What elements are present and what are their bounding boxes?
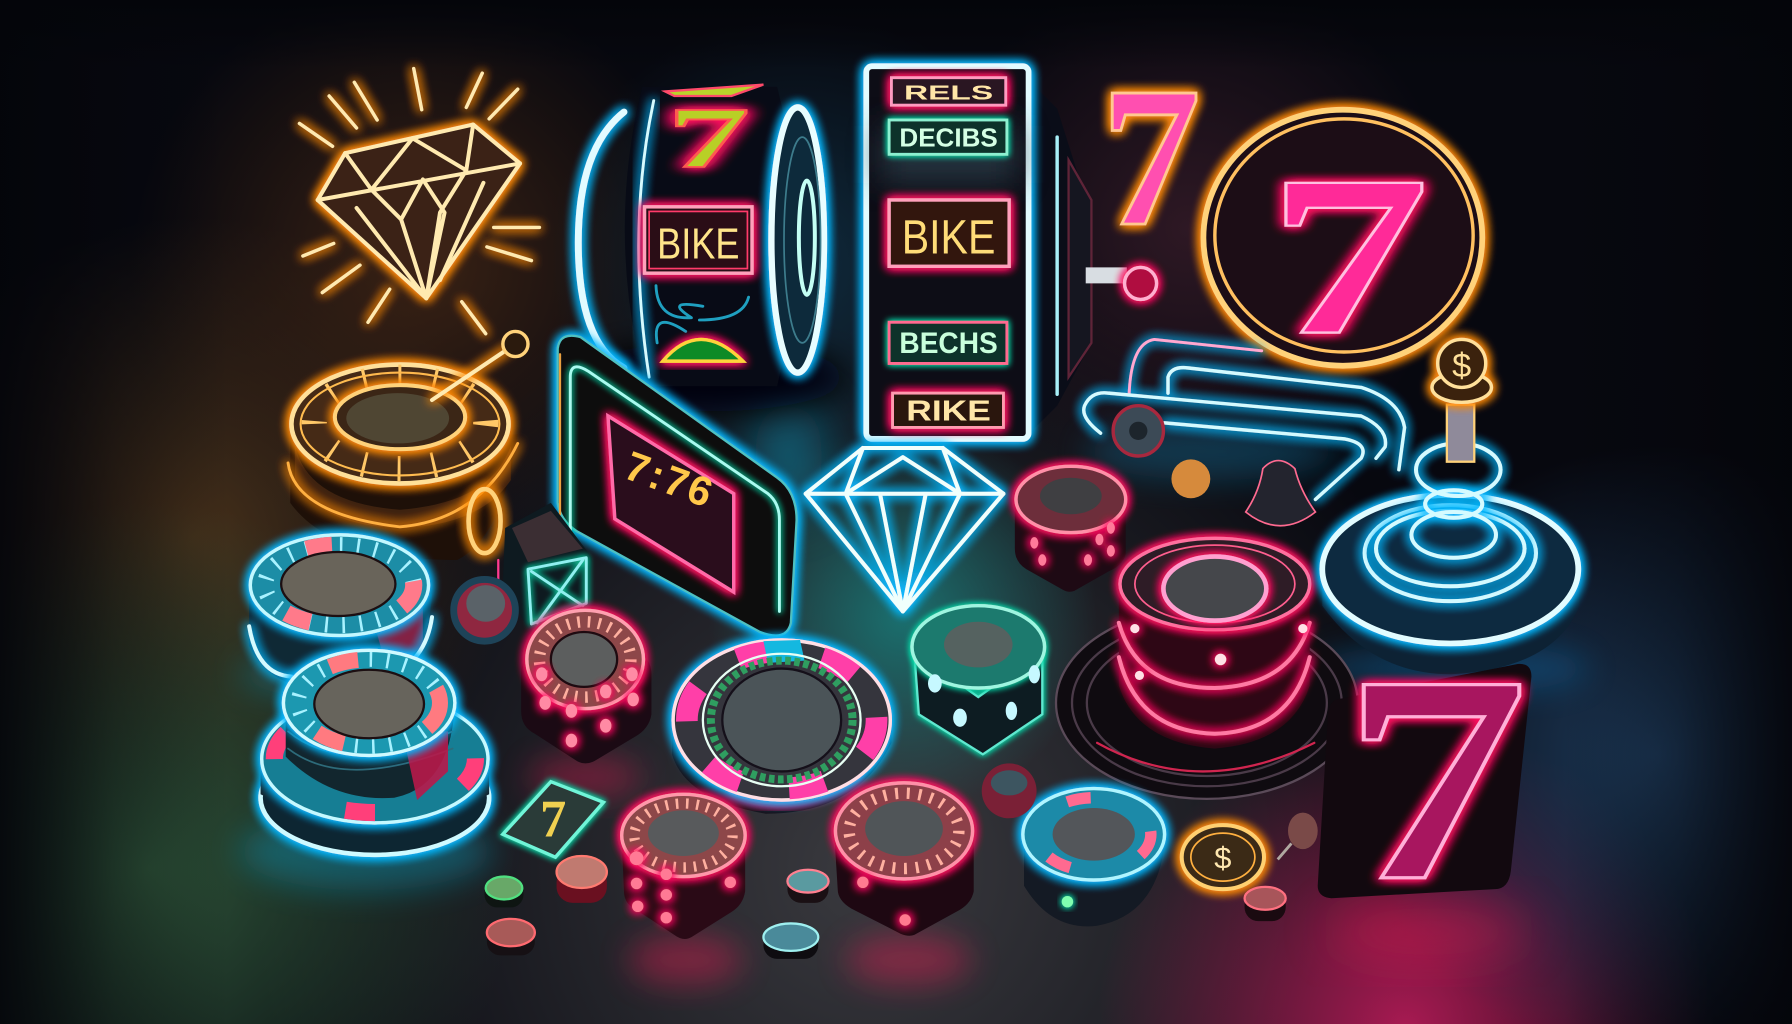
ring bbox=[469, 489, 501, 553]
tile bbox=[503, 782, 603, 857]
token: pink cyan bbox=[982, 763, 1037, 818]
box body bbox=[503, 503, 592, 629]
side stripe bbox=[402, 731, 448, 800]
label: bike: BIKE bbox=[902, 212, 995, 265]
die body bbox=[521, 651, 651, 763]
chip top bbox=[291, 365, 509, 483]
seven: 7 bbox=[1343, 615, 1528, 942]
knob: $ bbox=[1452, 347, 1471, 385]
dice: pink lower bbox=[622, 794, 745, 939]
cyan segment bbox=[763, 640, 805, 663]
inner disc bbox=[281, 552, 395, 616]
label: rike bbox=[893, 393, 1003, 428]
label: reels bbox=[891, 78, 1006, 105]
left slot reel bbox=[571, 85, 846, 411]
ring bbox=[673, 640, 890, 800]
flat seven bbox=[665, 85, 763, 96]
neon wire track bbox=[1084, 339, 1405, 499]
seven: 7 bbox=[540, 791, 566, 849]
base ring inner bbox=[1376, 511, 1525, 586]
upper ring bbox=[283, 650, 455, 755]
spring bbox=[1411, 443, 1501, 558]
label: reels: RELS bbox=[904, 81, 993, 104]
right rim bbox=[771, 107, 824, 373]
inner disc bbox=[722, 669, 841, 771]
ring spokes bbox=[265, 545, 414, 625]
top neon ring bbox=[1163, 557, 1266, 621]
pin head bbox=[503, 331, 528, 357]
token: red low bbox=[487, 919, 535, 955]
tablet neon line bbox=[570, 367, 779, 611]
rim grooves bbox=[784, 137, 821, 343]
top inner line bbox=[1135, 545, 1295, 623]
upper body bbox=[286, 703, 455, 798]
chip rim bbox=[301, 373, 499, 475]
tablet screen bbox=[608, 416, 734, 592]
side bbox=[672, 720, 891, 814]
box top bbox=[512, 511, 583, 562]
token: green bbox=[485, 877, 523, 907]
pink neon seven: 7 bbox=[1101, 47, 1201, 268]
pips bbox=[1030, 522, 1115, 566]
die top bbox=[527, 610, 643, 709]
lower ring bbox=[262, 695, 488, 823]
floor glow reflections bbox=[240, 400, 1589, 985]
metal bell bbox=[1246, 461, 1315, 526]
pips bbox=[857, 877, 911, 926]
green arc symbol bbox=[663, 339, 743, 361]
tower top bbox=[1120, 538, 1310, 630]
label: bike bbox=[645, 207, 752, 273]
side stripe bbox=[377, 606, 423, 674]
segments bbox=[1037, 798, 1151, 871]
top disc bbox=[865, 801, 943, 856]
top disc bbox=[944, 622, 1013, 667]
chip inner ring bbox=[335, 385, 465, 449]
body bbox=[1024, 834, 1166, 926]
die body bbox=[622, 834, 745, 939]
dice: pink center bbox=[834, 783, 974, 936]
green led bbox=[1062, 896, 1073, 907]
box face bbox=[528, 558, 586, 624]
tower body bbox=[1119, 594, 1310, 749]
neon tablet bbox=[558, 336, 797, 636]
right slot reel bbox=[866, 66, 1157, 439]
round neon seven sign bbox=[1203, 110, 1482, 382]
top disc bbox=[648, 810, 719, 856]
side hardware bbox=[1034, 86, 1091, 429]
die body bbox=[1015, 503, 1126, 592]
dice: pink left bbox=[521, 610, 651, 763]
small chip on wire bbox=[1113, 406, 1163, 456]
stack body bbox=[290, 432, 518, 560]
pips bbox=[536, 667, 639, 747]
dollar sign: $ bbox=[1214, 841, 1231, 876]
label: bike: BIKE bbox=[657, 220, 739, 268]
label: decibs: DECIBS bbox=[899, 122, 998, 152]
top bbox=[1023, 789, 1165, 880]
base glow bbox=[731, 777, 857, 801]
token: right bbox=[1245, 887, 1286, 921]
pin bbox=[432, 349, 509, 400]
swirl bbox=[656, 286, 749, 343]
lever bbox=[1086, 267, 1127, 283]
small tokens bbox=[485, 763, 1318, 959]
lever knob bbox=[1125, 267, 1157, 299]
neon joystick bbox=[1322, 339, 1579, 674]
card bbox=[1318, 664, 1531, 898]
rim hub bbox=[799, 181, 815, 295]
die body bbox=[834, 834, 974, 936]
coin inner bbox=[1191, 833, 1255, 881]
dice: pink upper right bbox=[1015, 466, 1126, 592]
upper spokes bbox=[298, 659, 440, 746]
pink chip tower on record bbox=[1056, 538, 1358, 799]
reel drum bbox=[625, 87, 795, 386]
inner disc bbox=[314, 670, 424, 738]
stack side bbox=[295, 446, 511, 528]
icon: gold neon diamond with rays bbox=[299, 69, 539, 334]
top ring bbox=[250, 535, 429, 635]
box accent bbox=[497, 560, 499, 617]
lower chip bbox=[261, 763, 489, 823]
top bbox=[1016, 466, 1126, 533]
tablet left edge bbox=[559, 354, 561, 514]
body stripes bbox=[288, 731, 453, 770]
center chip bbox=[672, 640, 891, 814]
sign disc bbox=[1203, 110, 1482, 366]
reel seven: 7 bbox=[667, 89, 750, 186]
cyan neon diamond bbox=[806, 448, 1003, 611]
knob bbox=[1432, 339, 1491, 402]
top bbox=[912, 606, 1045, 688]
side hub bbox=[1069, 160, 1091, 377]
neon seven card bbox=[1318, 615, 1531, 942]
shaft bbox=[1447, 405, 1474, 462]
die sides bbox=[914, 651, 1042, 754]
tablet body bbox=[558, 336, 797, 636]
top spokes bbox=[539, 622, 631, 697]
inner disc bbox=[1053, 808, 1135, 861]
base bbox=[1322, 495, 1578, 643]
side highlight bbox=[1056, 137, 1059, 394]
drum edge bbox=[639, 101, 654, 377]
gold chip stack bbox=[288, 331, 528, 560]
reel shadow bbox=[571, 343, 846, 411]
gold dollar coin bbox=[1182, 825, 1264, 889]
top disc bbox=[551, 632, 617, 687]
chip inner disc bbox=[346, 393, 449, 443]
lower pink bbox=[274, 705, 475, 813]
tower rings bbox=[1119, 623, 1310, 734]
pink segments bbox=[687, 651, 877, 789]
record grooves bbox=[1072, 619, 1342, 786]
label: rike: RIKE bbox=[906, 396, 991, 428]
small chip bbox=[454, 579, 515, 641]
pips bbox=[630, 851, 736, 923]
pips bbox=[928, 665, 1040, 727]
coin bbox=[1182, 825, 1264, 889]
top spokes bbox=[634, 803, 733, 867]
upper pink bbox=[298, 659, 440, 746]
dice: teal bbox=[912, 606, 1045, 754]
label: bechs: BECHS bbox=[899, 327, 998, 360]
top disc bbox=[1040, 478, 1102, 514]
seven: 7 bbox=[1267, 129, 1430, 382]
reel face bbox=[866, 66, 1029, 439]
inner ring bbox=[1215, 119, 1473, 352]
base ring bbox=[1365, 505, 1536, 601]
orange ball bbox=[1171, 459, 1210, 498]
inner white ring bbox=[703, 654, 861, 786]
reel sheen bbox=[880, 126, 1017, 183]
top bbox=[835, 783, 973, 879]
left rim bbox=[578, 112, 624, 368]
pin bbox=[1278, 813, 1318, 859]
base body bbox=[1322, 577, 1579, 674]
small seven tile bbox=[503, 782, 603, 857]
top spokes bbox=[849, 793, 959, 869]
token: small center bbox=[787, 870, 829, 903]
base ring bbox=[249, 617, 432, 677]
top bbox=[622, 794, 745, 877]
body bbox=[249, 594, 432, 688]
chip spokes bbox=[314, 377, 486, 469]
chip stack: large bbox=[261, 650, 489, 855]
side pips bbox=[1130, 624, 1307, 680]
base bbox=[261, 741, 489, 855]
chip: right of dice bbox=[1023, 789, 1166, 926]
small box bbox=[469, 489, 592, 629]
chip stack: top left bbox=[249, 535, 432, 688]
rainbow ring bbox=[711, 661, 853, 779]
token: red bbox=[557, 856, 607, 903]
pink segments bbox=[265, 545, 414, 625]
clock text: 7:76 bbox=[619, 442, 721, 517]
token: blue bbox=[763, 923, 818, 959]
stack edges bbox=[288, 443, 518, 527]
record base bbox=[1056, 607, 1358, 799]
